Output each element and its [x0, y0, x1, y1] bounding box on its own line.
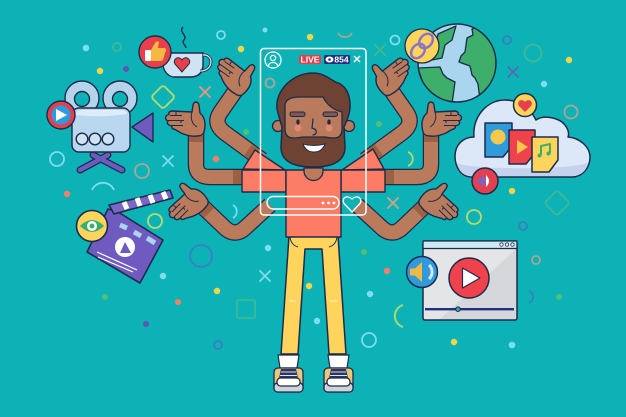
play file — [509, 130, 535, 164]
play button — [449, 258, 489, 298]
like heart — [343, 197, 361, 212]
ears — [272, 120, 354, 132]
eyebrows — [290, 112, 338, 116]
live badge: LIVE — [301, 55, 320, 65]
continents — [418, 26, 500, 104]
profile icon — [265, 52, 281, 68]
smile — [303, 144, 325, 152]
globe — [405, 24, 500, 104]
coffee cup with like badge — [139, 27, 211, 77]
right shoe — [324, 368, 353, 392]
progress bar — [425, 307, 514, 312]
live stream frame — [260, 48, 366, 215]
cup handle — [200, 55, 211, 71]
clapper body — [87, 209, 163, 283]
steam — [182, 27, 186, 48]
hands — [159, 48, 468, 230]
link badge — [405, 29, 439, 63]
play badge — [47, 101, 75, 129]
video player window — [406, 241, 517, 320]
title bar — [423, 241, 517, 248]
socks — [278, 355, 349, 368]
viewer count badge: 854 — [334, 55, 349, 65]
play circle — [115, 237, 135, 257]
shirt — [242, 149, 385, 237]
video file — [485, 123, 512, 157]
lens — [132, 113, 153, 142]
thumbs up badge — [139, 36, 171, 68]
clapper lines — [97, 252, 137, 272]
film reels — [65, 81, 137, 115]
cup — [163, 53, 203, 77]
legs and trousers — [281, 236, 346, 354]
cloud with media files — [455, 94, 590, 194]
camera buttons — [76, 133, 114, 145]
clapper stick — [109, 190, 173, 214]
arms — [196, 90, 431, 232]
movie camera — [47, 81, 153, 170]
close icon — [354, 56, 360, 62]
decorative confetti — [50, 28, 578, 349]
cloud — [455, 100, 590, 177]
speaker badge — [406, 256, 438, 288]
left shoe — [274, 368, 303, 392]
face — [285, 97, 342, 138]
hair and beard — [277, 73, 350, 167]
camera body — [72, 108, 130, 152]
illustration: live streaming multitasker — [46, 23, 591, 393]
viewer count badge — [324, 55, 350, 65]
eye badge — [76, 210, 108, 242]
character — [159, 48, 468, 392]
comment bar — [267, 196, 339, 209]
clapperboard — [76, 190, 173, 283]
cup heart — [174, 58, 190, 72]
tripod — [80, 155, 122, 170]
speaker badge — [472, 168, 498, 194]
heart badge — [514, 94, 536, 116]
eyes and cheeks — [294, 119, 332, 132]
music file — [532, 137, 558, 172]
nose — [312, 119, 316, 135]
neck — [304, 168, 323, 180]
